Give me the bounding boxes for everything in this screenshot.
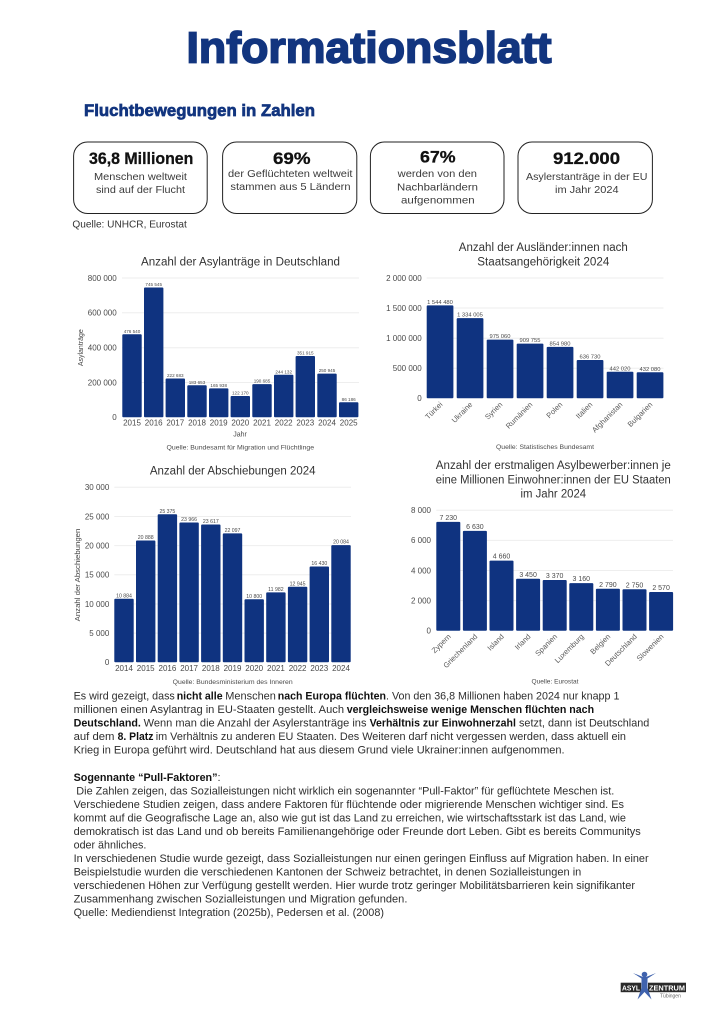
- value labels: 190 685: [254, 379, 271, 384]
- x axis labels: 2017: [166, 419, 185, 428]
- value labels: 183 653: [189, 380, 206, 385]
- y axis ticks: 0: [427, 626, 432, 636]
- paragraph: Verschiedene Studien zeigen, dass andere Faktoren für flüchtende oder migrierende Menschen wichtiger sind. Es: [74, 799, 624, 811]
- x axis labels: Rumänien: [504, 400, 534, 431]
- value labels: 122 170: [232, 390, 249, 396]
- text block: Einordnung: nach Europa flüchten: [278, 690, 386, 702]
- x axis labels: Syrien: [483, 400, 504, 421]
- y axis ticks: 15 000: [85, 571, 110, 580]
- bars: [122, 288, 358, 417]
- value labels: 745 545: [145, 282, 162, 287]
- text block: Einordnung: im Verhältnis zu anderen EU Staaten. Des Weiteren darf nicht vergessen werden, dass aktuell ein: [156, 731, 626, 743]
- y axis ticks: [411, 506, 432, 636]
- y axis title: Asylanträge: [78, 329, 85, 366]
- stat card: 69%: der Geflüchteten weltweit: [228, 168, 353, 180]
- logo: Asyl Zentrum: ZENTRUM: [649, 985, 685, 992]
- x axis labels: 2014: [115, 664, 133, 673]
- x axis labels: 2017: [180, 664, 199, 673]
- x axis labels: 2025: [340, 419, 358, 428]
- x axis labels: Türkei: [423, 400, 445, 421]
- heading: Fluchtbewegungen: Fluchtbewegungen in Zahlen: [84, 101, 315, 120]
- stat card: 912.000: Asylerstanträge in der EU: [526, 171, 647, 183]
- y axis ticks: 400 000: [88, 344, 117, 352]
- value labels: 10 884: [116, 593, 132, 599]
- value labels: 23 617: [203, 519, 219, 525]
- value labels: 432 080: [640, 367, 660, 373]
- x axis labels: 2021: [267, 664, 285, 673]
- x axis labels: Belgien: [588, 632, 612, 656]
- stat card: 69%: stammen aus 5 Ländern: [230, 181, 351, 193]
- text block: Einordnung: Menschen: [225, 690, 276, 702]
- value labels: 7 230: [440, 515, 457, 522]
- y axis ticks: [85, 483, 110, 667]
- y axis ticks: 5 000: [89, 629, 110, 638]
- value labels: 351 915: [297, 350, 314, 356]
- text block: Einordnung: Verhältnis zur Einwohnerzahl: [370, 718, 516, 730]
- y axis ticks: 1 500 000: [386, 304, 422, 313]
- value labels: 222 683: [167, 373, 184, 378]
- y axis ticks: 2 000 000: [386, 274, 422, 283]
- paragraph: [74, 786, 649, 919]
- chart title: im Jahr 2024: [520, 489, 587, 501]
- y axis title: Anzahl der Abschiebungen: [73, 529, 82, 621]
- x axis labels: 2016: [159, 664, 177, 673]
- y axis ticks: 8 000: [411, 506, 432, 515]
- value labels: 636 730: [580, 355, 600, 361]
- x axis labels: Slowenien: [635, 632, 666, 663]
- paragraph: demokratisch ist das Land und ob bereits Familienangehörige oder Freunde dort Leben. Gibt es bereits Communitys: [74, 826, 641, 838]
- y axis ticks: 20 000: [85, 541, 110, 550]
- x axis labels: 2020: [245, 664, 264, 673]
- x axis labels: 2022: [275, 419, 293, 428]
- y axis ticks: 25 000: [85, 512, 110, 521]
- chart title: Staatsangehörigkeit 2024: [477, 257, 610, 269]
- paragraph: verschiedenen Höhen zur Verfügung gestellt werden. Hier wurde trotz geringer Mobilitätsbarrieren kein signifikanter: [74, 880, 635, 892]
- value labels: 20 084: [333, 540, 349, 546]
- value labels: [427, 300, 660, 373]
- stat card: 69%: 69%: [273, 149, 310, 168]
- y axis ticks: 600 000: [88, 309, 117, 318]
- value labels: 3 160: [573, 576, 590, 583]
- text block: Einordnung: Wenn man die Anzahl der Asylerstanträge ins: [144, 718, 367, 730]
- value labels: 250 945: [319, 368, 336, 373]
- x axis labels: 2021: [253, 419, 271, 428]
- paragraph: oder ähnliches.: [74, 840, 146, 852]
- value labels: 4 660: [493, 554, 510, 561]
- x axis labels: Spanien: [533, 632, 559, 658]
- x axis labels: 2023: [310, 664, 329, 673]
- x axis labels: 2015: [137, 664, 155, 673]
- paragraph: In verschiedenen Studie wurde gezeigt, dass Sozialleistungen nur einen geringen Einfluss auf Migration haben. In einer: [74, 853, 649, 865]
- x axis labels: [423, 400, 654, 434]
- x axis labels: [123, 419, 358, 428]
- value labels: [440, 515, 670, 592]
- value labels: 16 430: [311, 561, 327, 567]
- value labels: 12 945: [290, 581, 306, 587]
- value labels: 11 982: [268, 587, 284, 593]
- logo: Asyl Zentrum: [621, 972, 686, 1000]
- bars: [114, 514, 351, 662]
- x axis labels: Polen: [544, 400, 564, 420]
- y axis ticks: 200 000: [88, 378, 117, 387]
- x axis labels: Ukraine: [450, 400, 474, 425]
- y axis ticks: 2 000: [411, 596, 432, 605]
- value labels: 2 750: [626, 582, 643, 589]
- x axis labels: Zypern: [430, 632, 453, 655]
- stat card: 67%: werden von den: [397, 168, 477, 180]
- value labels: 854 980: [550, 342, 570, 348]
- value labels: 244 132: [275, 369, 292, 374]
- y axis ticks: [88, 274, 117, 422]
- x axis labels: Irland: [513, 632, 533, 652]
- x axis labels: Afghanistan: [590, 400, 624, 434]
- value labels: 1 334 005: [457, 313, 483, 319]
- stat card: 67%: 67%: [420, 148, 456, 167]
- chart title: Anzahl der Ausländer:innen nach: [459, 242, 628, 254]
- chart title: Anzahl der Abschiebungen 2024: [150, 465, 316, 477]
- value labels: 6 630: [466, 524, 484, 531]
- chart title: [459, 242, 628, 269]
- y axis ticks: 0: [112, 413, 117, 422]
- paragraph: Quelle: Mediendienst Integration (2025b), Pedersen et al. (2008): [74, 907, 384, 919]
- y axis ticks: 1 000 000: [386, 334, 422, 343]
- y axis ticks: 10 000: [85, 600, 110, 609]
- y axis ticks: 0: [105, 658, 110, 667]
- stat card: 36,8 Millionen: 36,8 Millionen: [89, 149, 193, 168]
- x axis labels: 2016: [145, 419, 163, 428]
- text block: Einordnung: [74, 690, 649, 756]
- chart title: eine Millionen Einwohner:innen der EU Staaten: [436, 475, 671, 487]
- value labels: 1 544 480: [427, 300, 453, 306]
- stat card: 36,8 Millionen: [74, 142, 207, 214]
- text block: Einordnung: vergleichsweise wenige Menschen flüchten nach: [347, 704, 594, 716]
- chart title: Anzahl der Asylanträge in Deutschland: [141, 256, 340, 268]
- paragraph: Zusammenhang zwischen Sozialleistungen und Migration gefunden.: [74, 894, 407, 906]
- value labels: [116, 509, 349, 600]
- value labels: 86 186: [342, 397, 356, 402]
- logo: Asyl Zentrum: ASYL: [622, 985, 641, 992]
- bars: [427, 305, 663, 398]
- text block: Einordnung: Deutschland.: [74, 718, 141, 730]
- x axis labels: 2023: [296, 419, 315, 428]
- subheading: :: [218, 772, 221, 784]
- value labels: 2 790: [599, 582, 617, 589]
- value labels: 909 755: [520, 338, 540, 344]
- text block: Einordnung: 8. Platz: [118, 731, 154, 743]
- subheading: Sogennante “Pull-Faktoren”: [74, 772, 217, 784]
- value labels: 22 097: [225, 528, 241, 534]
- text block: Pull-Faktoren: [74, 772, 649, 919]
- x axis labels: 2015: [123, 419, 141, 428]
- text block: Einordnung: Es wird gezeigt, dass: [74, 690, 175, 702]
- x axis labels: Island: [485, 632, 506, 653]
- chart source: Quelle: Eurostat: [532, 679, 579, 685]
- x axis labels: 2022: [289, 664, 307, 673]
- y axis ticks: 800 000: [88, 274, 117, 283]
- x axis labels: 2019: [224, 664, 242, 673]
- x axis labels: 2024: [332, 664, 350, 673]
- x axis labels: Bulgarien: [626, 400, 654, 429]
- value labels: [124, 282, 356, 402]
- chart source: Quelle: Statistisches Bundesamt: [496, 445, 594, 451]
- text block: Einordnung: setzt, dann ist Deutschland: [519, 718, 649, 730]
- title: Informationsblatt: [186, 23, 552, 72]
- x axis labels: 2024: [318, 419, 336, 428]
- x axis labels: 2018: [202, 664, 220, 673]
- paragraph: Beispielstudie wurden die verschiedenen Kantonen der Schweiz betrachtet, in denen Sozialleistungen in: [74, 866, 581, 878]
- text block: Einordnung: millionen einen Asylantrag in EU-Staaten gestellt. Auch: [74, 704, 344, 716]
- x axis title: Jahr: [233, 432, 247, 439]
- stat card: 67%: [370, 142, 504, 214]
- text block: Einordnung: . Von den 36,8 Millionen haben 2024 nur knapp 1: [386, 690, 619, 702]
- y axis ticks: 500 000: [393, 364, 422, 373]
- bars: [436, 522, 673, 631]
- y axis ticks: 4 000: [411, 566, 432, 575]
- text block: Einordnung: nicht alle: [177, 690, 223, 702]
- logo: Asyl Zentrum: Tübingen: [660, 994, 681, 1000]
- value labels: 23 966: [181, 517, 197, 523]
- y axis ticks: 30 000: [85, 483, 110, 492]
- stat card: 36,8 Millionen: Menschen weltweit: [94, 171, 187, 183]
- chart: Abschiebungen: [73, 465, 351, 686]
- text block: Einordnung: Krieg in Europa geführt wird. Deutschland hat aus diesem Grund viele Ukrainer:innen aufgenommen.: [74, 744, 564, 756]
- chart source: Quelle: Bundesamt für Migration und Flüchtlinge: [166, 445, 315, 451]
- value labels: 3 370: [546, 573, 564, 580]
- chart: erstmalige Asylbewerber je Million Einwohner: [411, 460, 673, 685]
- x axis labels: Italien: [574, 400, 594, 421]
- x axis labels: 2020: [231, 419, 250, 428]
- stat card: 67%: aufgenommen: [401, 195, 475, 207]
- x axis labels: Luxemburg: [553, 632, 586, 665]
- chart title: Anzahl der erstmaligen Asylbewerber:innen je: [436, 460, 671, 472]
- paragraph: Die Zahlen zeigen, das Sozialleistungen nicht wirklich ein sogenannter “Pull-Faktor” für geflüchtete Meschen ist.: [76, 786, 614, 798]
- text block: Einordnung: auf dem: [74, 731, 114, 743]
- value labels: 10 800: [246, 594, 262, 600]
- value labels: 165 938: [210, 383, 227, 388]
- chart: Ausländer nach Staatsangehörigkeit: [386, 242, 664, 451]
- stat card: 912.000: [518, 142, 652, 214]
- x axis labels: [430, 632, 666, 670]
- value labels: 442 020: [610, 366, 630, 372]
- chart source: Quelle: Bundesministerium des Inneren: [173, 680, 293, 686]
- paragraph: kommt auf die Geografische Lage an, also wie gut ist das Land zu erreichen, wie wirtschaftsstark ist das Land, wie: [74, 812, 626, 824]
- stat card: 912.000: im Jahr 2024: [555, 184, 619, 196]
- x axis labels: Griechenland: [441, 632, 479, 670]
- y axis ticks: 6 000: [411, 536, 432, 545]
- y axis ticks: [386, 274, 422, 403]
- value labels: 3 450: [519, 572, 537, 579]
- x axis labels: 2018: [188, 419, 206, 428]
- value labels: 20 888: [138, 535, 154, 541]
- value labels: 975 060: [490, 334, 510, 340]
- chart title: [436, 460, 671, 501]
- stat card: 69%: [223, 142, 357, 214]
- value labels: 25 375: [159, 509, 175, 515]
- y axis ticks: 0: [417, 394, 422, 403]
- x axis labels: [115, 664, 350, 673]
- source: cards: Quelle: UNHCR, Eurostat: [72, 219, 187, 231]
- stat card: 36,8 Millionen: sind auf der Flucht: [96, 184, 185, 196]
- stat card: 912.000: 912.000: [553, 149, 620, 168]
- x axis labels: Deutschland: [603, 632, 639, 668]
- stat card: 67%: Nachbarländern: [397, 182, 478, 194]
- chart: Asylanträge in Deutschland: [78, 256, 359, 451]
- value labels: 2 570: [652, 585, 670, 592]
- x axis labels: 2019: [210, 419, 228, 428]
- value labels: 476 540: [124, 329, 141, 334]
